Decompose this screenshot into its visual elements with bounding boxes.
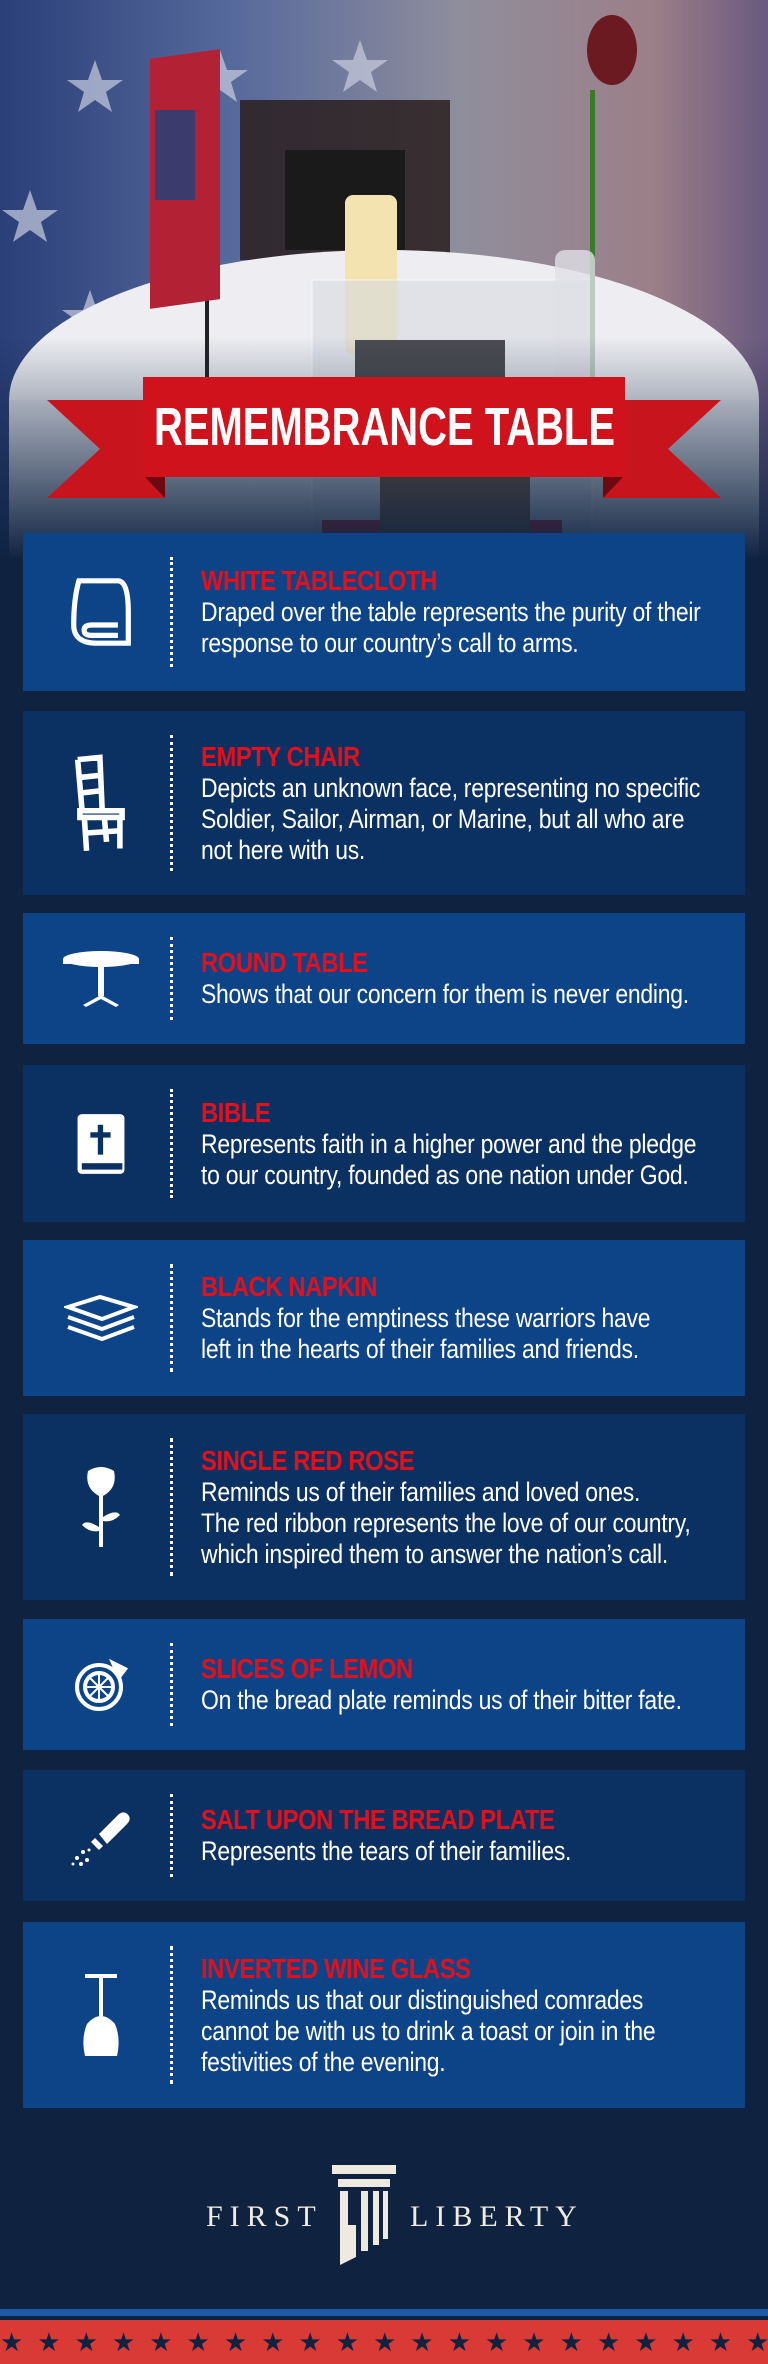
icon: salt shaker [72,1812,130,1866]
icon: table [63,951,139,1007]
icon: tablecloth [71,578,131,646]
text: inverted wine glass: INVERTED WINE GLASS [201,1952,471,1984]
icon: chair [74,754,125,851]
text: inverted wine glass [201,1952,655,2076]
title banner [47,377,721,498]
panel: white tablecloth [23,533,745,691]
panel: black napkin [23,1240,745,1396]
text: single red rose: SINGLE RED ROSE [201,1444,414,1476]
header photo [0,0,768,560]
text: single red rose: which inspired them to answer the nation’s call. [201,1538,668,1568]
logo: First Liberty: LIBERTY [410,2200,584,2233]
rose [590,90,595,390]
text: black napkin: Stands for the emptiness these warriors have [201,1303,650,1333]
text: bible: to our country, founded as one nation under God. [201,1160,688,1190]
text: round table: ROUND TABLE [201,947,368,978]
text: single red rose [201,1444,690,1568]
text: salt: SALT UPON THE BREAD PLATE [201,1804,554,1835]
logo: First Liberty: FIRST [206,2200,323,2233]
text: black napkin: left in the hearts of their families and friends. [201,1334,639,1364]
text: round table [201,947,689,1009]
panel: slices of lemon [23,1619,745,1750]
text: empty chair [201,740,700,864]
text: white tablecloth: WHITE TABLECLOTH [201,565,437,596]
text: black napkin [201,1271,650,1364]
text: single red rose: The red ribbon represents the love of our country, [201,1508,690,1538]
text: empty chair: not here with us. [201,834,365,864]
text: white tablecloth [201,565,701,658]
footer stripe [0,2309,768,2364]
text: inverted wine glass: Reminds us that our distinguished comrades [201,1984,643,2014]
text: round table: Shows that our concern for them is never ending. [201,979,689,1009]
logo: First Liberty [206,2165,584,2265]
icon: bible [78,1114,124,1174]
chair [240,100,450,260]
table [9,250,759,550]
panel: bible [23,1065,745,1222]
text: slices of lemon: SLICES OF LEMON [201,1653,413,1684]
text: inverted wine glass: festivities of the evening. [201,2046,445,2076]
text: bible: Represents faith in a higher power and the pledge [201,1128,696,1158]
text: slices of lemon: On the bread plate reminds us of their bitter fate. [201,1685,682,1715]
icon: napkin [64,1294,138,1342]
text: empty chair: EMPTY CHAIR [201,740,360,772]
box + bible [312,280,592,540]
panel: inverted wine glass [23,1922,745,2108]
text: bible [201,1096,696,1190]
candle [345,195,397,355]
text: inverted wine glass: cannot be with us to drink a toast or join in the [201,2016,655,2046]
text: single red rose: Reminds us of their families and loved ones. [201,1476,640,1506]
panel: empty chair [23,711,745,895]
text: black napkin: BLACK NAPKIN [201,1271,377,1302]
text: white tablecloth: response to our country’s call to arms. [201,628,578,658]
panel: salt [23,1770,745,1901]
icon: wine glass [83,1974,119,2056]
text: salt [201,1804,571,1866]
icon: lemon [75,1658,128,1711]
text: salt: Represents the tears of their families. [201,1836,571,1866]
panel: single red rose [23,1414,745,1600]
text: slices of lemon [201,1653,682,1715]
title banner: REMEMBRANCE TABLE [154,397,615,457]
text: bible: BIBLE [201,1096,270,1128]
text: white tablecloth: Draped over the table represents the purity of their [201,597,701,627]
flag [205,70,209,440]
icon: rose [82,1467,120,1547]
text: empty chair: Soldier, Sailor, Airman, or Marine, but all who are [201,804,684,834]
panel: round table [23,913,745,1044]
text: empty chair: Depicts an unknown face, representing no specific [201,772,700,802]
